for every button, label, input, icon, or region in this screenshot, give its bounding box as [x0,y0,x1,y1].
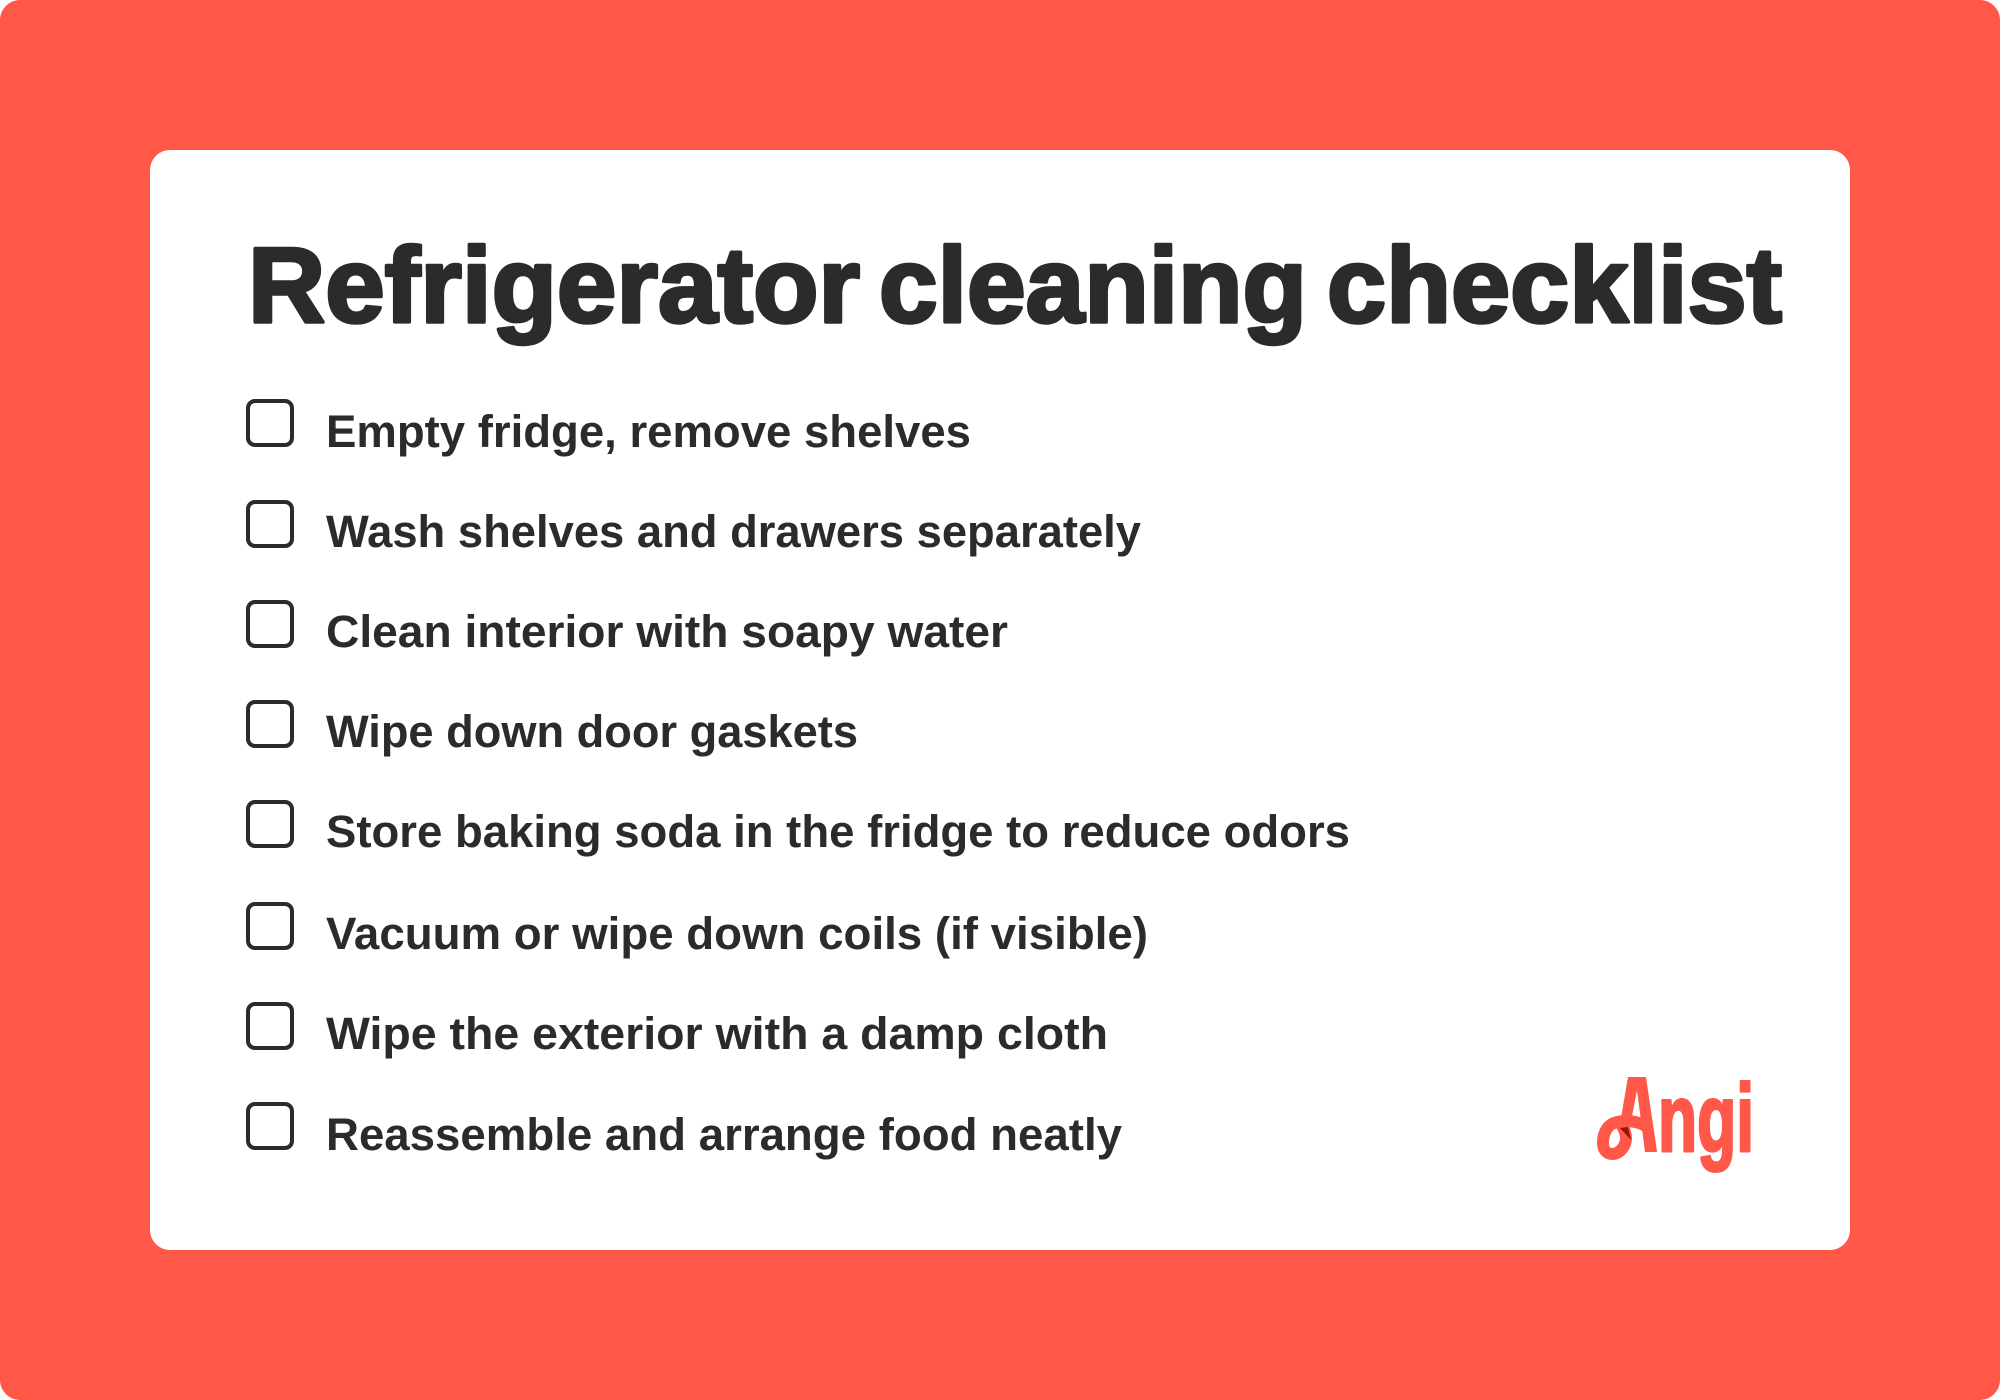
item: reassemble: Reassemble and arrange food neatly [326,1109,1122,1160]
item: empty fridge: Empty fridge, remove shelves [326,406,971,457]
item: wash shelves: Wash shelves and drawers separately [326,506,1141,557]
title: checklist [1327,225,1782,345]
item: baking soda: Store baking soda in the fridge to reduce odors [326,806,1350,857]
white card [150,150,1850,1250]
logo: Angi: ngi [1658,1065,1754,1172]
item: door gaskets: Wipe down door gaskets [326,706,858,757]
title [248,225,1782,345]
item: clean interior: Clean interior with soapy water [326,606,1008,657]
item: exterior: Wipe the exterior with a damp cloth [326,1008,1108,1059]
title: cleaning [879,225,1307,345]
checklist [248,401,1350,1160]
title: Refrigerator [248,225,860,345]
logo: Angi: A [1618,1054,1660,1176]
logo: Angi [1597,1077,1750,1173]
item: coils: Vacuum or wipe down coils (if visible) [326,908,1148,959]
